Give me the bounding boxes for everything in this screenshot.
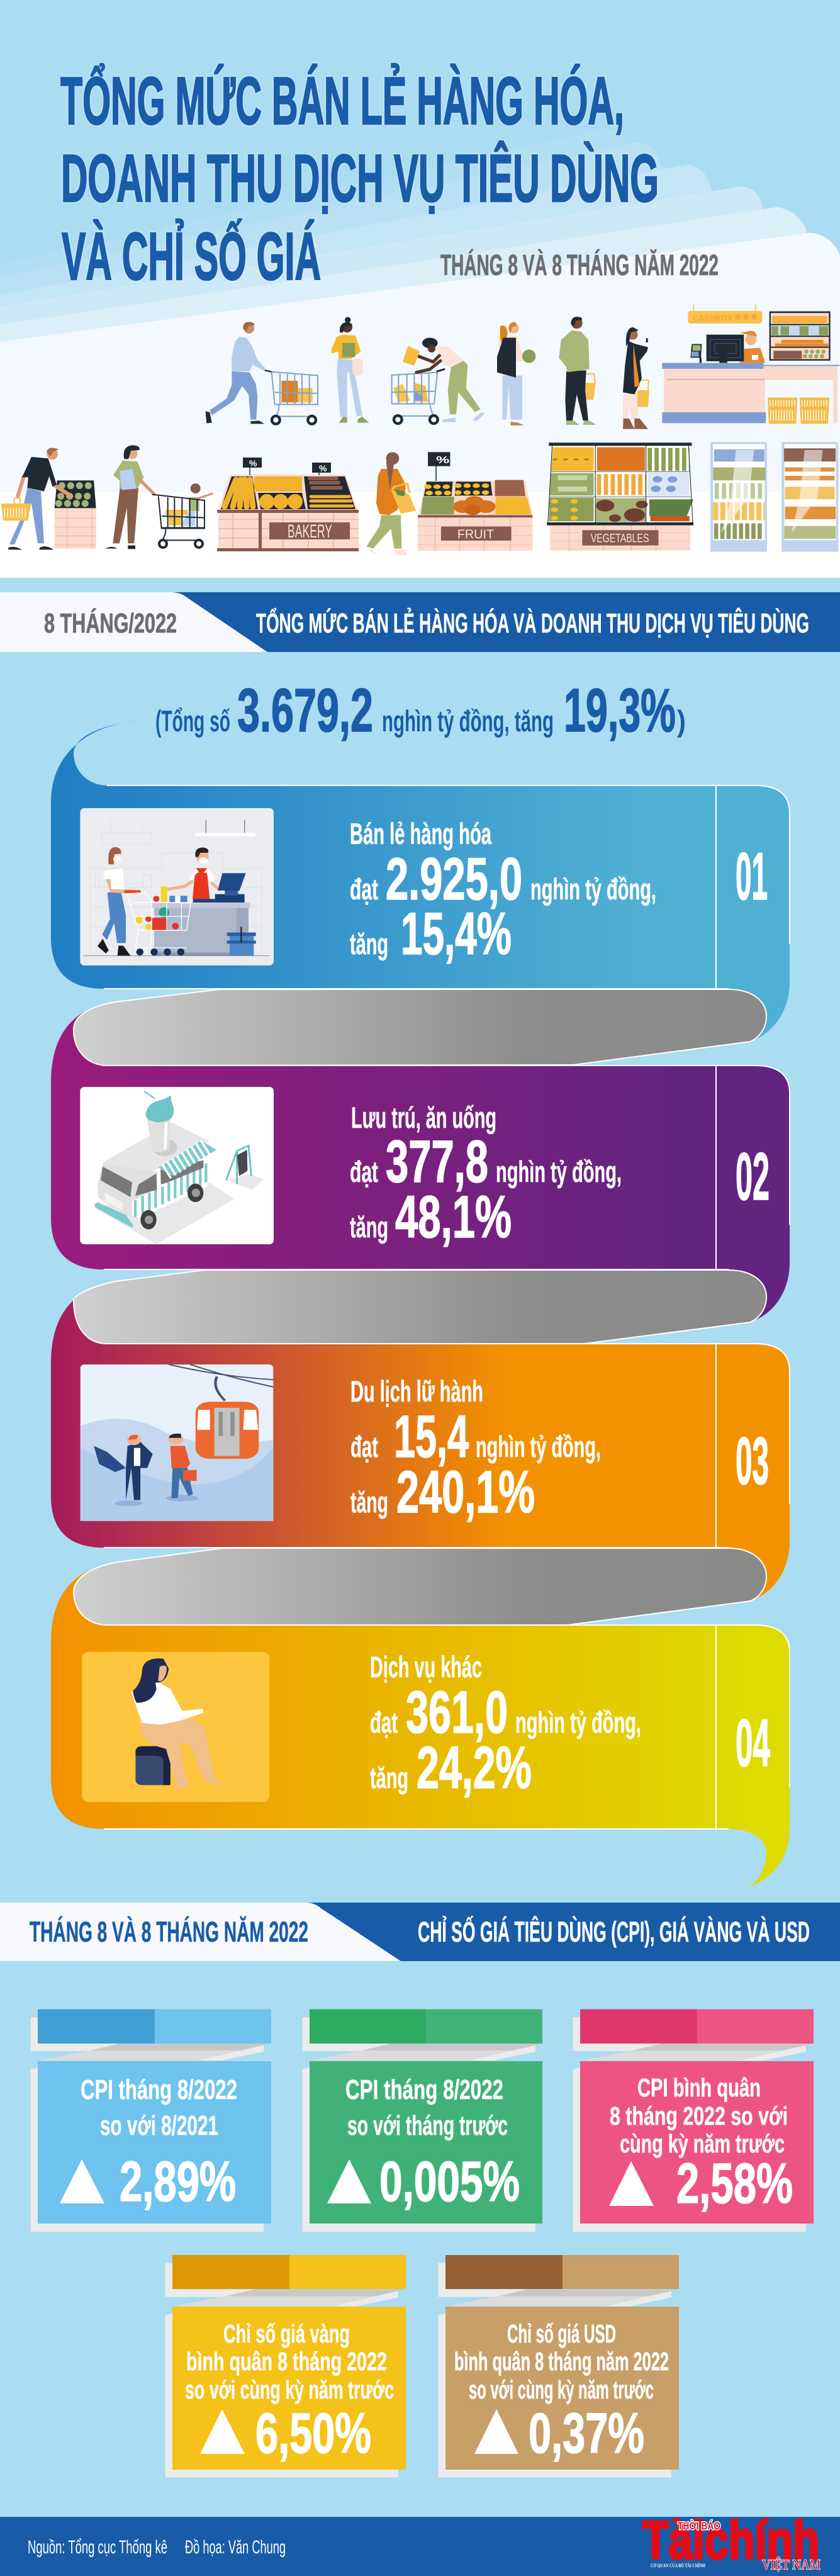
value: revenue: [350, 846, 656, 913]
woman with phone: [623, 327, 649, 429]
title: [60, 63, 659, 294]
woman bending over trolley: [392, 338, 485, 424]
value: 2,58%: [676, 2152, 793, 2215]
panel 01: retail: 01: [736, 838, 768, 914]
man at vegetable stand illustration: [1, 445, 212, 549]
logo: CƠ QUAN CỦA BỘ TÀI CHÍNH: [651, 2562, 706, 2568]
up triangle: [60, 2159, 104, 2203]
fruit vegetable and fridge illustration: [366, 442, 838, 556]
footer: [0, 2511, 840, 2576]
value: growth: [370, 1735, 532, 1801]
card: CPI 8/2022 vs 8/2021: [30, 2009, 271, 2232]
total summary line: [155, 676, 686, 745]
value: revenue: đạt: [370, 1706, 398, 1739]
value: growth: tăng: [350, 1210, 388, 1244]
source credit: Nguồn: Tổng cục Thống kê: [28, 2537, 167, 2558]
card: USD price index: [438, 2255, 679, 2477]
value: 2,89%: [120, 2151, 236, 2213]
card text: Chỉ số giá vàng: [223, 2319, 350, 2348]
value: revenue: nghìn tỷ đồng,: [515, 1706, 641, 1739]
card text: [345, 2074, 508, 2141]
panel 01: retail: [51, 721, 790, 1042]
up triangle: [609, 2161, 654, 2206]
fruit discount tag: [428, 452, 450, 481]
header label left: 8 THÁNG/2022: [44, 607, 177, 639]
value: revenue: nghìn tỷ đồng,: [530, 872, 656, 906]
card text: [185, 2319, 394, 2404]
card text: so với tháng trước: [347, 2110, 508, 2141]
hero banner: [0, 0, 840, 578]
value: growth: [350, 1459, 535, 1526]
bakery sign: BAKERY: [288, 521, 332, 542]
cashbox sign: [688, 305, 762, 323]
logo: THỜI BÁO: [678, 2520, 720, 2532]
card: average CPI 8 months: [573, 2009, 814, 2232]
title: VÀ CHỈ SỐ GIÁ: [62, 218, 321, 294]
card text: so với cùng kỳ năm trước: [185, 2375, 394, 2404]
total summary line: (Tổng số: [155, 704, 230, 738]
value: growth: tăng: [350, 927, 388, 960]
panel 04: other services: [51, 1562, 790, 1888]
value: growth: tăng: [350, 1485, 388, 1519]
card text: [81, 2074, 237, 2141]
section header: CPI, gold and USD: [0, 1903, 840, 1961]
card text: so với 8/2021: [100, 2110, 218, 2141]
card text: CPI tháng 8/2022: [81, 2074, 237, 2105]
value: revenue: nghìn tỷ đồng,: [476, 1430, 601, 1463]
total summary line: 3.679,2: [237, 676, 373, 745]
total summary line: nghìn tỷ đồng, tăng: [382, 704, 554, 738]
grey ribbon fold 1: [74, 989, 766, 1066]
panel 04: other services: 04: [736, 1705, 770, 1780]
card text: [610, 2073, 788, 2158]
grey ribbon fold 2: [74, 1270, 766, 1344]
discount tags: [243, 458, 331, 475]
card: gold price index: [165, 2255, 406, 2477]
value: revenue: đạt: [350, 1155, 378, 1188]
value: revenue: 15,4: [394, 1403, 469, 1470]
fruit stall: [418, 452, 532, 551]
total summary line: 19,3%: [564, 676, 676, 745]
value: growth: 24,2%: [417, 1735, 532, 1801]
shoppers with trolleys illustration: [206, 317, 485, 424]
vegetable stall: [547, 442, 693, 551]
section header: 8 months: [0, 592, 840, 652]
value: revenue: [350, 1403, 601, 1470]
man pushing trolley: [206, 322, 266, 424]
value: revenue: nghìn tỷ đồng,: [496, 1155, 622, 1188]
value: growth: 48,1%: [395, 1184, 512, 1251]
grey ribbon fold 3: [74, 1548, 766, 1625]
value: revenue: 377,8: [386, 1128, 488, 1195]
food shelf: [770, 312, 831, 361]
checkout counter: [662, 363, 839, 423]
card text: CPI bình quân: [637, 2073, 761, 2102]
label: Lưu trú, ăn uống: [351, 1101, 496, 1134]
label: Bán lẻ hàng hóa: [350, 817, 492, 850]
discount tags: %: [249, 458, 257, 468]
value: growth: [350, 901, 512, 967]
up triangle: [327, 2159, 371, 2203]
label: Dịch vụ khác: [370, 1650, 482, 1684]
fruit sign: FRUIT: [457, 527, 494, 541]
up triangle: [474, 2409, 518, 2454]
woman in orange hoodie: [366, 452, 416, 556]
value: growth: 240,1%: [396, 1459, 535, 1526]
queue and cashier illustration: [497, 305, 839, 429]
total summary line: ): [677, 704, 686, 738]
baskets: [768, 398, 829, 424]
bakery sign: [269, 521, 350, 542]
value: revenue: [350, 1128, 622, 1195]
value: growth: [350, 1184, 512, 1251]
value: revenue: [370, 1679, 641, 1746]
vegetables sign: VEGETABLES: [591, 532, 649, 545]
fridge two: [781, 442, 838, 552]
vegetables sign: [582, 530, 658, 546]
graphic credit: Đồ họa: Văn Chung: [185, 2537, 286, 2558]
cashier and monitor: [690, 331, 765, 363]
panel 03: travel: [51, 1281, 790, 1601]
value: 0,005%: [379, 2151, 520, 2213]
shopper in black shirt: [1, 447, 71, 549]
illustration: cable car: [81, 1364, 273, 1521]
discount tags: %: [319, 463, 327, 473]
woman with notebook: [332, 317, 369, 423]
illustration: food truck: [80, 1087, 274, 1244]
cashbox sign: CASHBOX: [693, 313, 733, 322]
value: revenue: đạt: [350, 872, 378, 906]
value: 0,37%: [529, 2402, 644, 2465]
trolley one: [265, 370, 318, 424]
fruit discount tag: %: [436, 455, 449, 466]
up triangle: [200, 2409, 245, 2454]
illustration: seated woman: [82, 1652, 269, 1802]
card text: so với cùng kỳ năm trước: [469, 2375, 654, 2404]
value: revenue: đạt: [350, 1430, 378, 1463]
panel 03: travel: 03: [736, 1423, 769, 1499]
card text: [454, 2319, 669, 2404]
woman with child in trolley: [106, 445, 212, 549]
bakery stall: [217, 458, 359, 551]
card text: CPI tháng 8/2022: [345, 2074, 503, 2105]
value: growth: tăng: [370, 1761, 408, 1794]
value: revenue: 2.925,0: [386, 846, 522, 913]
crate of greens: [55, 480, 96, 549]
man in green sweater: [559, 317, 596, 425]
header label left: THÁNG 8 VÀ 8 THÁNG NĂM 2022: [30, 1916, 308, 1948]
panel 02: accommodation and food: 02: [736, 1139, 770, 1214]
value: growth: 15,4%: [401, 901, 512, 967]
value: revenue: 361,0: [406, 1679, 508, 1746]
card text: bình quân 8 tháng năm 2022: [454, 2347, 669, 2376]
illustration: checkout: [80, 808, 274, 965]
label: Du lịch lữ hành: [350, 1375, 483, 1408]
panel 02: accommodation and food: [51, 1002, 790, 1322]
fridge one: [710, 442, 767, 552]
card text: Chỉ số giá USD: [507, 2319, 616, 2348]
card text: bình quân 8 tháng 2022: [186, 2347, 387, 2376]
woman with melon: [497, 322, 535, 425]
logo: VIỆT NAM: [762, 2556, 820, 2572]
card: CPI 8/2022 vs previous month: [302, 2009, 542, 2232]
value: 6,50%: [255, 2402, 371, 2465]
